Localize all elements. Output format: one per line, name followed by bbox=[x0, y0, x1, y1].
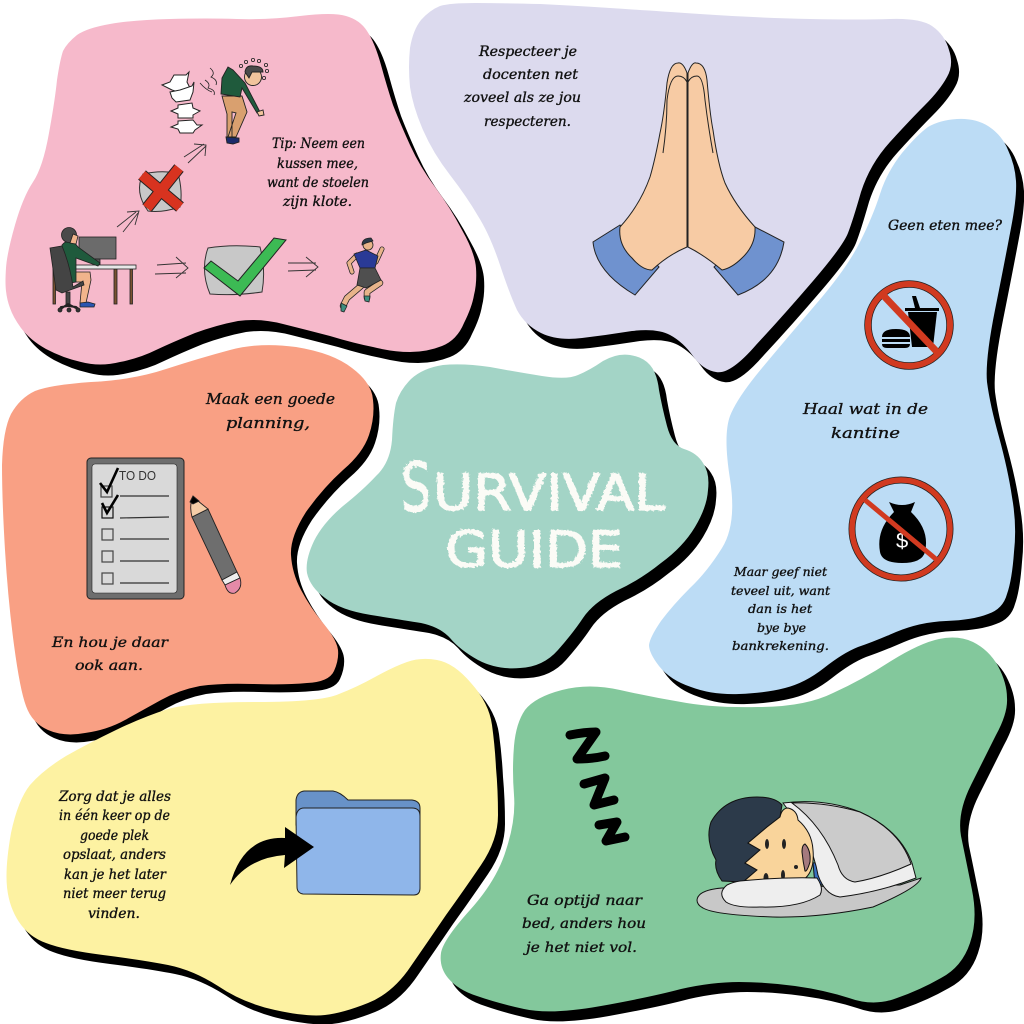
title: URVIVAL bbox=[433, 464, 665, 522]
text: do not overspend bbox=[731, 565, 830, 653]
text: make a plan: planning, bbox=[226, 416, 310, 432]
icon: man with back pain bbox=[200, 58, 269, 144]
text: do not overspend: bankrekening. bbox=[732, 639, 829, 653]
icon: spine bbox=[162, 72, 202, 133]
respect text: Respecteer je bbox=[478, 44, 577, 60]
icon: running man bbox=[341, 238, 382, 312]
text: save in the right place: goede plek bbox=[80, 828, 149, 844]
panel: planning bbox=[2, 345, 380, 742]
icon: pencil bbox=[190, 496, 241, 593]
tip text bbox=[267, 136, 369, 210]
text: save in the right place: niet meer terug bbox=[63, 886, 166, 902]
icon: to do clipboard bbox=[87, 458, 184, 599]
panel: title blob bbox=[307, 355, 716, 678]
text: make a plan bbox=[205, 392, 335, 432]
icon: sleeping person bbox=[697, 797, 921, 917]
text: save in the right place bbox=[58, 789, 171, 922]
title: S bbox=[401, 449, 431, 528]
text: go to bed on time: je het niet vol. bbox=[523, 940, 637, 956]
icon: no money sign: $ bbox=[896, 528, 908, 553]
text: go to bed on time: bed, anders hou bbox=[522, 916, 646, 932]
text: save in the right place: vinden. bbox=[88, 906, 140, 922]
arrow: check to runner bbox=[288, 257, 318, 277]
text: save in the right place: opslaat, anders bbox=[63, 847, 166, 863]
title bbox=[401, 449, 665, 579]
panel: back pain and cushion tip bbox=[6, 14, 484, 376]
icon: cushion with check mark bbox=[204, 238, 286, 296]
icon: cushion crossed out bbox=[139, 168, 181, 212]
icon: zzz bbox=[570, 732, 625, 841]
panel: respect teachers bbox=[409, 3, 959, 382]
arrow: desk to cushion with check bbox=[155, 257, 188, 278]
arrow: cross to back pain bbox=[184, 144, 206, 163]
icon: no money sign bbox=[852, 480, 950, 578]
panel: save files bbox=[6, 659, 505, 1024]
text: do not overspend: bye bye bbox=[757, 621, 806, 635]
text: go to bed on time bbox=[522, 893, 646, 956]
title: GUIDE bbox=[445, 521, 623, 579]
text: stick to it bbox=[51, 635, 169, 674]
text: stick to it: En hou je daar bbox=[51, 635, 169, 651]
text: stick to it: ook aan. bbox=[75, 658, 143, 674]
text: canteen: kantine bbox=[831, 424, 900, 442]
tip text: kussen mee, bbox=[277, 156, 358, 172]
panel: sleep bbox=[441, 638, 1015, 1021]
text: do not overspend: teveel uit, want bbox=[731, 584, 830, 598]
tip text: zijn klote. bbox=[282, 194, 352, 210]
arrow: desk to cushion with cross bbox=[117, 211, 139, 232]
tip text: Tip: Neem een bbox=[272, 136, 365, 152]
tip text: want de stoelen bbox=[267, 175, 369, 191]
icon: folder bbox=[296, 791, 420, 895]
text: save in the right place: in één keer op de bbox=[59, 808, 170, 824]
icon: praying hands bbox=[593, 63, 784, 295]
text: save in the right place: Zorg dat je alles bbox=[58, 789, 171, 805]
respect text bbox=[463, 44, 581, 130]
text: do not overspend: dan is het bbox=[748, 602, 812, 616]
respect text: docenten net bbox=[483, 67, 579, 83]
text: no food: Geen eten mee? bbox=[888, 218, 1003, 234]
text: save in the right place: kan je het later bbox=[64, 867, 167, 883]
text: do not overspend: Maar geef niet bbox=[733, 565, 827, 579]
respect text: zoveel als ze jou bbox=[463, 90, 581, 106]
text: canteen bbox=[802, 400, 928, 442]
icon: no food sign bbox=[868, 284, 950, 366]
panel: canteen food advice bbox=[649, 119, 1024, 704]
icon: person working at desk bbox=[50, 228, 136, 312]
text: canteen: Haal wat in de bbox=[802, 400, 928, 418]
text: make a plan: Maak een goede bbox=[205, 392, 335, 408]
icon: to do clipboard: TO DO bbox=[119, 468, 156, 483]
text: go to bed on time: Ga optijd naar bbox=[527, 893, 644, 909]
arrow: into folder bbox=[230, 827, 314, 885]
respect text: respecteren. bbox=[484, 114, 571, 130]
